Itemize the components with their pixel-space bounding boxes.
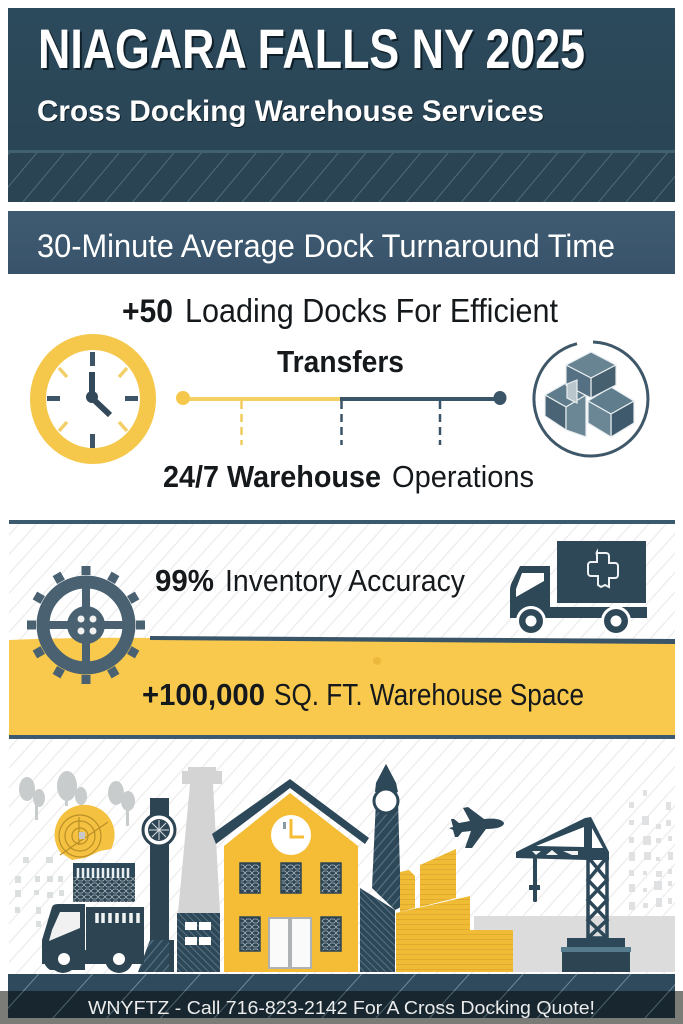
panel: turnaround ribbon (8, 211, 675, 274)
icon: boxes (534, 342, 648, 456)
icon: hatched wall (360, 888, 395, 972)
icon: radar dish (55, 805, 115, 860)
text: loading docks (122, 292, 558, 379)
icon: dark tower with wheel (138, 798, 175, 972)
icon: faint buildings left (15, 857, 64, 927)
gray ground area (474, 916, 675, 972)
text: loading docks: Transfers (277, 344, 404, 379)
header hatched band (8, 153, 675, 202)
text: warehouse space (142, 677, 584, 712)
icon: delivery truck with cargo (42, 904, 144, 973)
icon: gray chimney (178, 767, 222, 913)
text: warehouse space: +100,000 (142, 677, 265, 712)
text: inventory accuracy: 99% (155, 563, 214, 598)
panel: yellow warehouse space band (9, 636, 675, 736)
text: 24/7 operations: Operations (392, 459, 534, 494)
building clock (271, 815, 311, 855)
text: inventory accuracy: Inventory Accuracy (225, 563, 465, 598)
icon: yellow warehouse building (212, 779, 369, 972)
text: 24/7 operations (163, 459, 534, 494)
subtitle: Cross Docking Warehouse Services (37, 95, 544, 128)
text: warehouse space: SQ. FT. Warehouse Space (274, 677, 584, 712)
icon: airplane (449, 807, 504, 848)
icon: cargo container (73, 863, 135, 902)
icon: delivery truck (510, 541, 647, 636)
panel: ground strip (8, 974, 675, 992)
icon: faint buildings right (629, 790, 673, 910)
icon: trees (19, 771, 135, 826)
icon: clock tower (372, 764, 401, 910)
panel: header (8, 8, 675, 202)
ribbon text: 30-Minute Average Dock Turnaround Time (37, 228, 615, 264)
panel: inventory accuracy stripe background (9, 524, 675, 640)
hatched block with windows (177, 913, 220, 972)
text: 24/7 operations: 24/7 Warehouse (163, 459, 381, 494)
icon: gear (27, 566, 145, 684)
timeline (176, 391, 506, 445)
footer text: WNYFTZ - Call 716-823-2142 For A Cross Docking Quote! (88, 998, 595, 1018)
text: loading docks: Loading Docks For Efficient (185, 292, 558, 329)
icon: clock (38, 342, 148, 456)
panel: footer bar (0, 991, 683, 1024)
icon: yellow brick stacks (396, 849, 513, 972)
door (269, 918, 311, 968)
icon: construction crane (516, 817, 631, 972)
panel: city scene background stripes (9, 739, 675, 974)
text: loading docks: +50 (122, 293, 173, 329)
